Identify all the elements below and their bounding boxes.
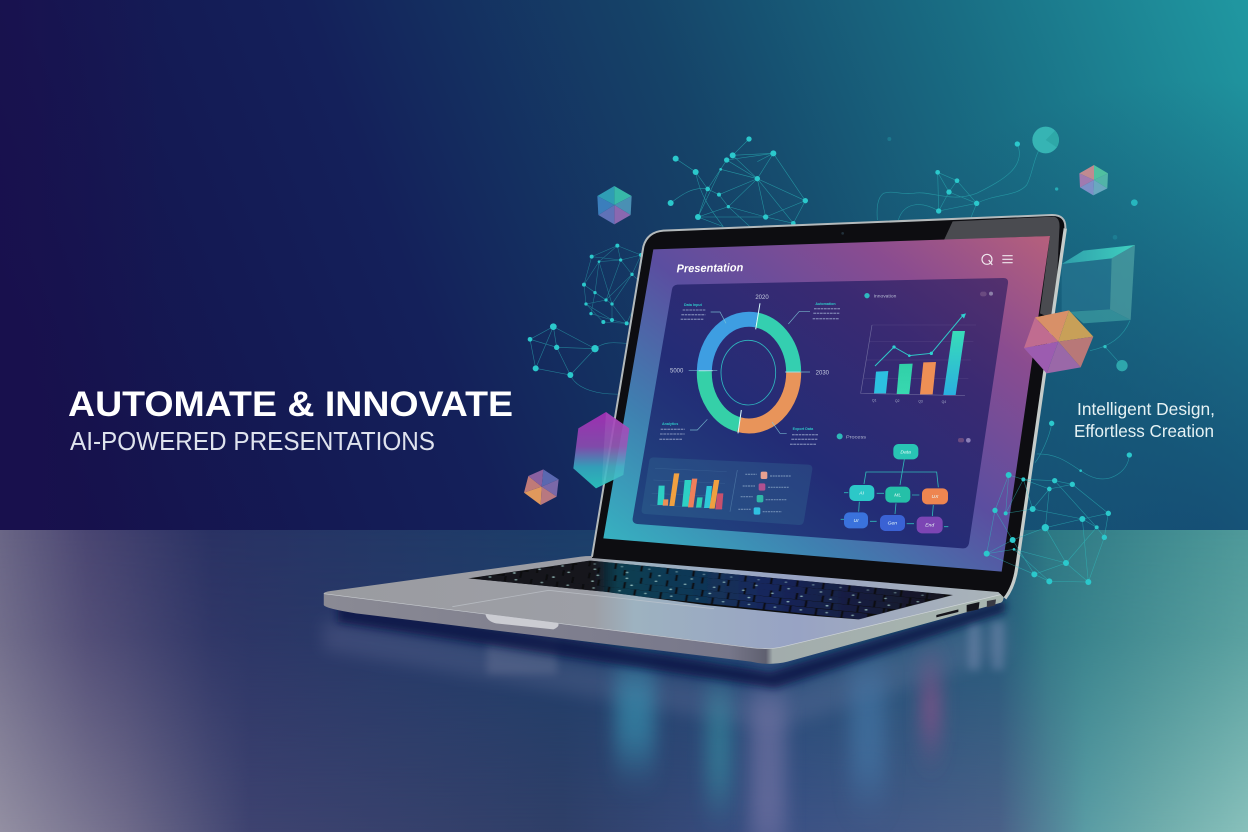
network: top centre mesh	[668, 136, 808, 227]
icon: teal circle	[1032, 127, 1059, 153]
screen title: Presentation	[677, 262, 743, 275]
screen	[603, 236, 1050, 572]
network: lower-left mesh with curves	[528, 323, 628, 394]
donut callouts: Export Data	[793, 427, 814, 431]
network: left sphere mesh	[582, 244, 643, 325]
growth bar and line chart: Q4	[942, 400, 946, 404]
tagline	[1074, 399, 1215, 441]
flowchart: UX	[932, 494, 939, 500]
keyboard	[468, 561, 953, 619]
icon: menu	[1002, 256, 1013, 263]
donut callouts	[662, 302, 836, 431]
laptop base	[324, 556, 1004, 664]
donut value labels	[670, 295, 830, 377]
background wall	[0, 0, 1248, 530]
growth bar and line chart	[861, 292, 993, 404]
icon: purple teal hexagon	[573, 412, 629, 488]
icon: blue teal hexagon, top left	[597, 186, 632, 224]
donut callouts: Analytics	[662, 422, 678, 426]
laptop lid and screen	[592, 215, 1065, 598]
icon: translucent glass cube	[1062, 245, 1135, 371]
title: AUTOMATE & INNOVATE	[68, 385, 513, 424]
growth bar and line chart: Q1	[872, 399, 877, 403]
donut chart	[659, 295, 840, 444]
trackpad notch	[485, 614, 559, 629]
growth bar and line chart: Q3	[918, 399, 923, 403]
flowchart: ML	[894, 492, 901, 498]
flowchart: Gen	[888, 521, 897, 527]
chart heading: Innovation	[874, 293, 897, 298]
flowchart: Data	[900, 449, 911, 455]
donut value labels: 5000	[670, 369, 684, 375]
subtitle: AI-POWERED PRESENTATIONS	[70, 426, 435, 456]
growth bar and line chart: Q2	[895, 399, 900, 403]
donut value labels: 2020	[755, 295, 769, 301]
tagline: Intelligent Design,	[1077, 399, 1215, 419]
donut callouts: Data Input	[684, 303, 703, 307]
donut callouts: Automation	[815, 302, 836, 306]
laptop reflection on floor	[323, 600, 1008, 832]
laptop	[324, 215, 1065, 664]
network: lower right mesh	[984, 421, 1132, 585]
icon: search	[982, 254, 992, 265]
donut value labels: 2030	[816, 371, 830, 377]
legend chips	[738, 472, 791, 515]
flowchart: Process	[846, 434, 866, 439]
lid silver edge	[592, 215, 1065, 557]
icon: orange purple polyhedron	[1024, 310, 1093, 373]
trackpad outline	[452, 590, 714, 609]
icon: small orange hexagon	[524, 469, 559, 505]
flowchart: UI	[853, 518, 859, 524]
flowchart: AI	[858, 491, 865, 497]
network: top right curves and mesh	[877, 127, 1138, 240]
lid bezel	[592, 215, 1065, 598]
webcam	[841, 232, 844, 235]
reflective floor	[0, 530, 1248, 832]
flowchart: End	[925, 523, 934, 529]
lid bezel reflection	[944, 217, 1060, 320]
icon: small hexagon, top right	[1079, 165, 1108, 195]
small dashboard: grouped bars and legend	[642, 457, 812, 525]
dashboard panel	[633, 278, 1008, 548]
tagline: Effortless Creation	[1074, 421, 1214, 441]
flowchart	[837, 433, 971, 533]
side ports	[936, 599, 996, 617]
